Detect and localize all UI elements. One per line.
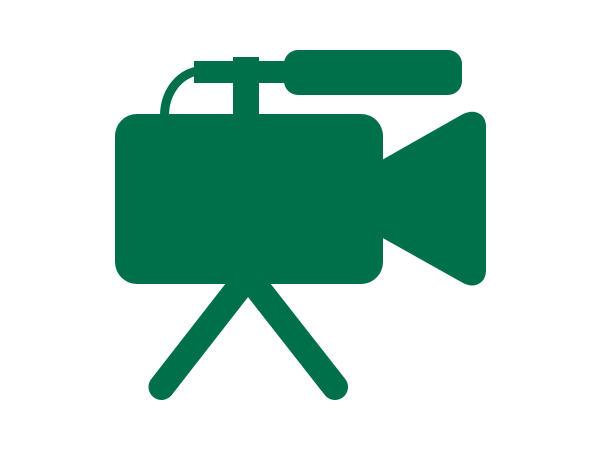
tripod legs [162,276,335,387]
microphone connector [194,61,289,83]
camera body [115,114,383,284]
microphone cable [164,71,197,116]
microphone [284,50,462,95]
lens cone [381,112,486,286]
mounting post [233,57,259,117]
